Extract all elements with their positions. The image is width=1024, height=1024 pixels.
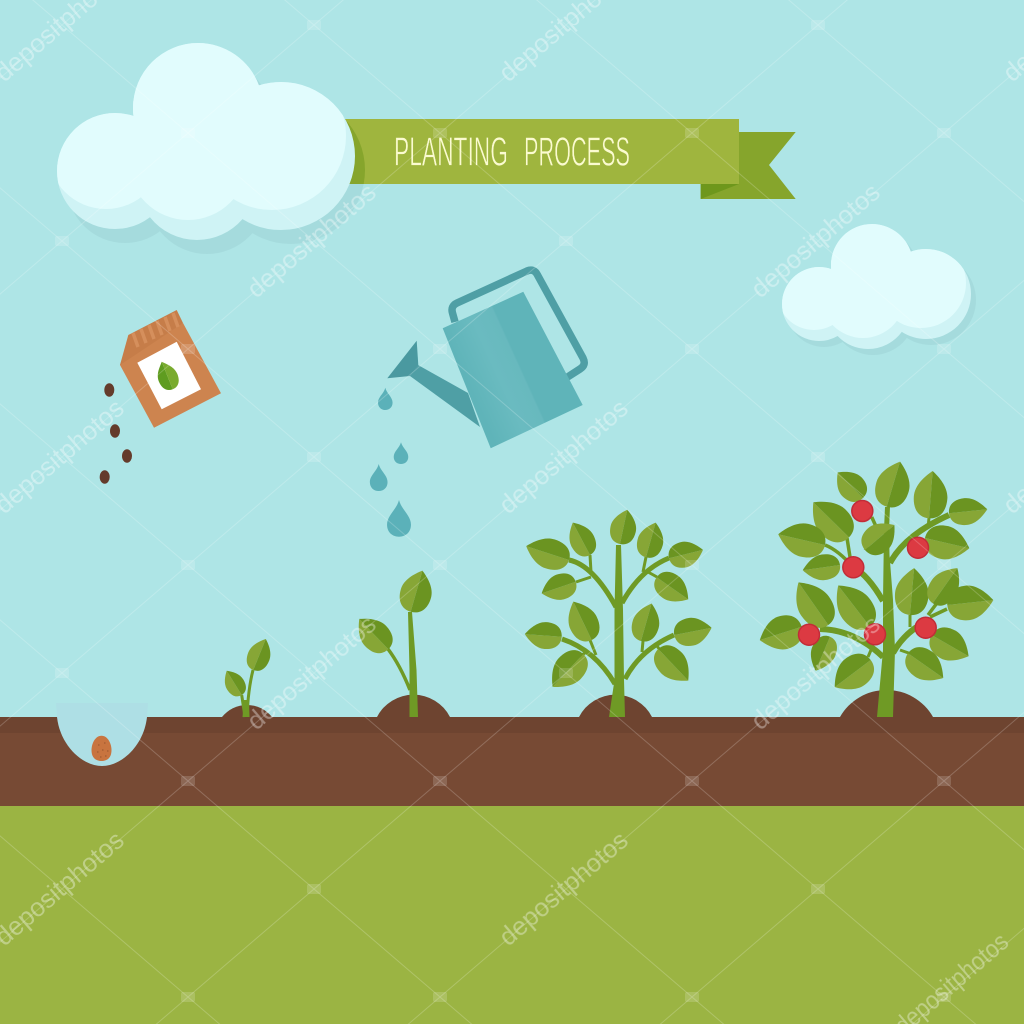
stems [388,649,410,690]
stage: fruiting plant [755,457,995,717]
cloud shadow on ribbon [346,121,365,184]
falling seeds [100,383,132,484]
mound [840,690,933,717]
packet label [137,342,201,409]
watermark text: depositphotos [493,825,634,952]
title ribbon [345,119,796,199]
soil band [0,717,1024,806]
stage: young plant [522,507,714,717]
ribbon band [340,119,739,184]
can rose [387,341,418,378]
can body [443,292,583,448]
stems [242,670,253,717]
branches [820,515,949,657]
can spout [410,365,480,427]
small cloud [782,224,971,349]
title text: PLANTING [394,128,508,174]
water drops [370,388,411,537]
leaves [243,635,276,674]
stage: seedling [349,566,450,717]
watermark text: depositphotos [745,609,886,736]
large cloud [57,43,355,240]
ribbon tail [701,132,796,199]
watering can [387,270,584,448]
seed packet [120,310,221,428]
mound [222,705,272,717]
watermark text: depositphotos [241,609,382,736]
watermark text: depositphotos [745,177,886,304]
mound [377,695,450,717]
leaves [607,507,640,547]
large cloud shadow [67,57,365,254]
can handle [452,270,584,378]
mound [579,695,652,717]
tomatoes [798,500,936,645]
stage: sprout [219,635,276,717]
ribbon fold [701,184,739,199]
title text: PROCESS [524,128,630,174]
packet flap [120,310,183,365]
leaves [871,457,916,511]
planting hole [56,703,148,766]
packet leaf icon [152,358,182,393]
watermark text: depositphotos [241,177,382,304]
trunk and branches [562,555,674,684]
trunk [877,507,895,717]
small cloud shadow [787,230,976,355]
leaves [396,566,438,616]
flap ridges [133,313,178,347]
green field [0,806,1024,1024]
watermark text: depositphotos [493,393,634,520]
planted seed [92,736,112,761]
packet body [120,323,221,428]
